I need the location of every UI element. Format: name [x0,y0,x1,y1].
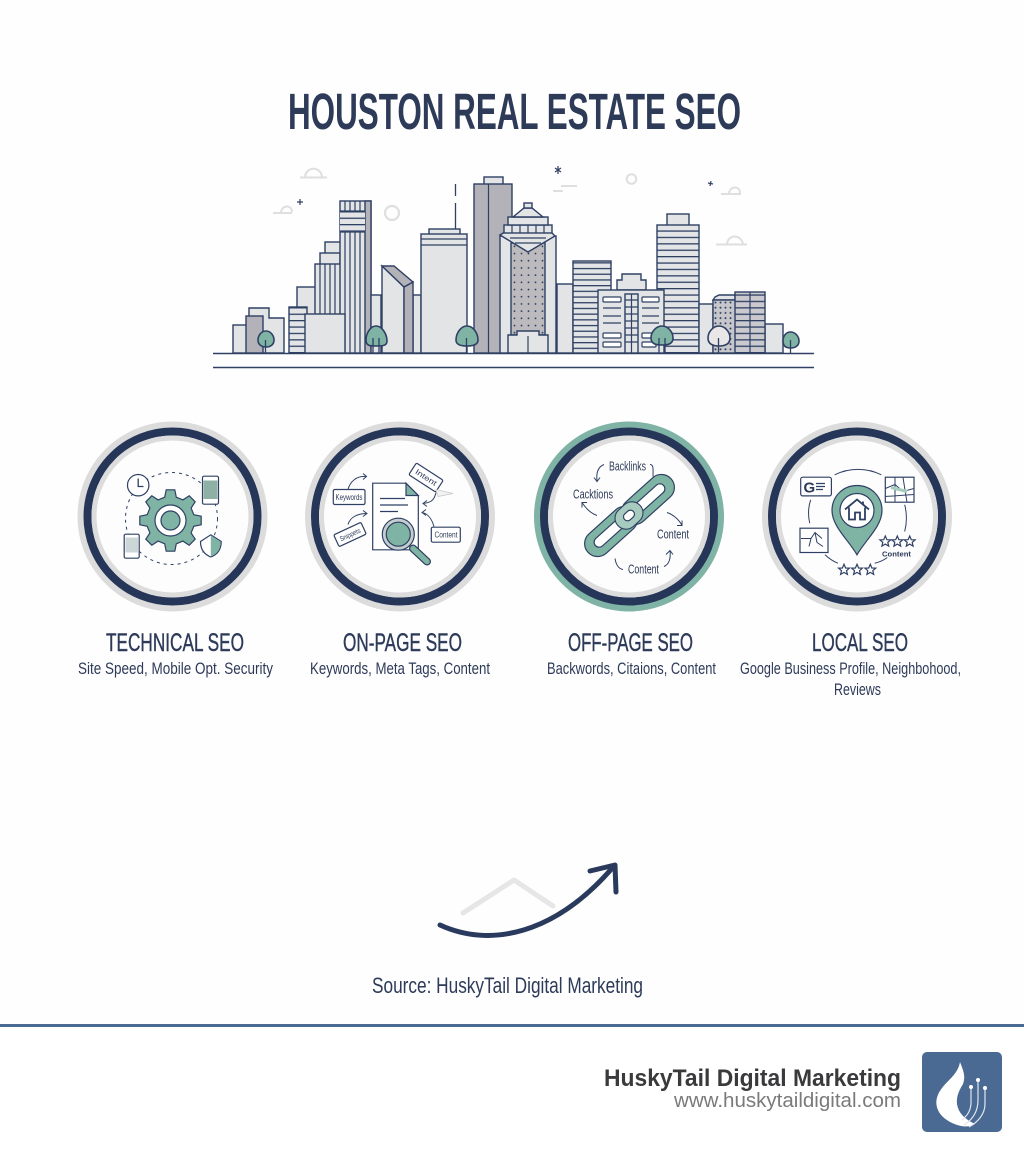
building: office block [598,274,664,353]
trees [258,326,799,353]
icon: house roof with growth arrow [440,865,616,935]
panel: local SEO [740,422,961,699]
title: HOUSTON REAL ESTATE SEO [288,83,741,140]
heading: LOCAL SEO [812,629,908,657]
icon: map pin with listing, maps and stars [800,469,915,574]
heading: TECHNICAL SEO [106,629,244,657]
footer divider [0,1024,1024,1027]
logo [922,1052,1002,1132]
icon: chain link with labels: Content [657,526,689,542]
panel: on-page SEO [305,422,495,678]
building: slanted roof tower [371,266,421,353]
building: tall striped tower right [657,214,699,353]
badge ring [534,422,724,612]
building: twin shaft tower [474,177,512,353]
icon: document with magnifier and labels: Intent [413,467,439,488]
illustration: Houston skyline [213,166,814,368]
building: crowned skyscraper [500,203,556,353]
icon: chain link with labels: Content [628,562,659,576]
icon: map pin with listing, maps and stars: Content [882,552,912,558]
icon: document with magnifier and labels: Snippets [339,527,362,543]
icon: document with magnifier and labels [333,463,460,562]
badge ring [762,422,952,612]
footer website: www.huskytaildigital.com [673,1090,901,1112]
description: Keywords, Meta Tags, Content [310,659,490,678]
icon: chain link with labels: Cacktions [573,486,613,502]
panel: off-page SEO [534,422,724,678]
description: Backwords, Citaions, Content [547,659,716,678]
panel: technical SEO [78,422,273,678]
building group: left low-rises [233,287,317,353]
building: striped mid-rise [557,261,611,353]
icon: chain link with labels: Backlinks [609,458,646,474]
building: front podium [305,314,345,353]
description [740,659,961,699]
heading: OFF-PAGE SEO [568,629,693,657]
icon: document with magnifier and labels: Content [434,530,458,540]
badge ring [78,422,268,612]
building group: right low-rises [699,292,783,353]
icon: map pin with listing, maps and stars: G [804,480,815,496]
badge ring [305,422,495,612]
icon: document with magnifier and labels: Keywords [336,493,362,502]
building: tall striped tower [340,201,371,353]
icon: gear with devices [124,472,221,564]
heading: ON-PAGE SEO [343,629,462,657]
clouds and sky details [273,166,747,244]
description: Reviews [834,680,881,699]
source note: Source: HuskyTail Digital Marketing [372,973,643,998]
footer [0,1024,1024,1154]
ground lines [213,354,814,368]
building: stepped tower [315,242,342,316]
building: antenna tower [421,184,467,353]
footer brand name: HuskyTail Digital Marketing [604,1065,901,1092]
icon: chain link with labels [573,458,689,576]
description: Site Speed, Mobile Opt. Security [78,659,273,678]
